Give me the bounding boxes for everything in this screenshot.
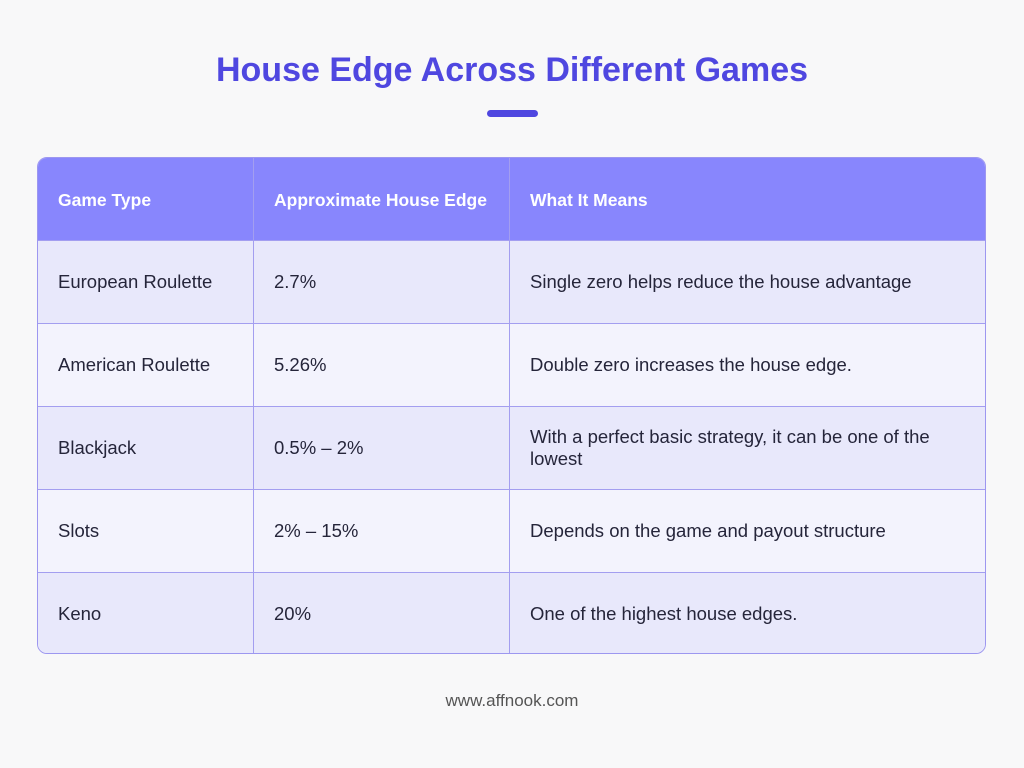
table: [37, 157, 986, 654]
row: European Roulette: [38, 240, 987, 323]
header row: [38, 158, 987, 241]
header row: Game Type: [58, 190, 151, 210]
row: Keno: 20%: [274, 603, 311, 624]
row: American Roulette: American Roulette: [58, 354, 210, 375]
row: American Roulette: Double zero increases the house edge.: [530, 354, 852, 375]
row: American Roulette: 5.26%: [274, 354, 326, 375]
footer: www.affnook.com: [446, 691, 578, 710]
row: Slots: [38, 489, 987, 572]
row: European Roulette: European Roulette: [58, 271, 212, 292]
header row: Approximate House Edge: [274, 190, 487, 210]
title underline: [487, 110, 538, 117]
row: Slots: Slots: [58, 520, 99, 541]
row: Blackjack: lowest: [530, 448, 582, 469]
row: Slots: Depends on the game and payout structure: [530, 520, 886, 541]
header row: What It Means: [530, 190, 648, 210]
row: Blackjack: 0.5% – 2%: [274, 437, 363, 458]
title: House Edge Across Different Games: [216, 51, 808, 89]
row: Slots: 2% – 15%: [274, 520, 358, 541]
row: Blackjack: [38, 406, 987, 489]
row: European Roulette: 2.7%: [274, 271, 316, 292]
row: Blackjack: With a perfect basic strategy, it can be one of the: [530, 426, 930, 447]
row: Keno: [38, 572, 987, 655]
row: American Roulette: [38, 323, 987, 406]
row: Keno: One of the highest house edges.: [530, 603, 797, 624]
row: Blackjack: Blackjack: [58, 437, 136, 458]
row: Keno: Keno: [58, 603, 101, 624]
row: European Roulette: Single zero helps reduce the house advantage: [530, 271, 912, 292]
